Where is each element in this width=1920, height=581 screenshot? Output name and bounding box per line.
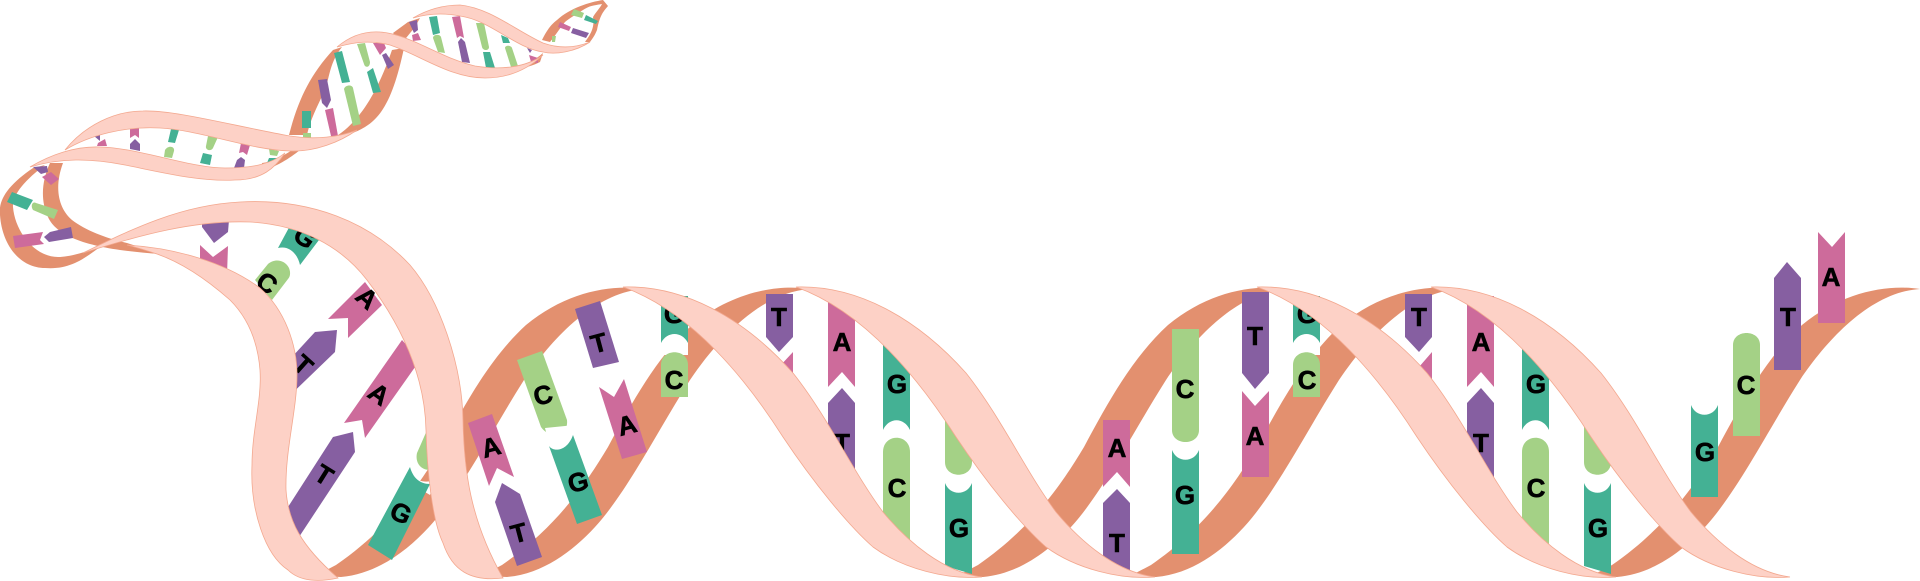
pair: G-C 2: C xyxy=(888,473,907,503)
single base: G xyxy=(1691,405,1718,497)
bar: T purple upper xyxy=(280,330,337,405)
pair: T-A 1 xyxy=(766,294,794,395)
orange ribbon: upper helix right segment xyxy=(335,48,404,137)
pair: A-T 3: A xyxy=(1472,327,1491,357)
pair: A-T 2: T xyxy=(1109,528,1125,558)
bars: lobe 1 xyxy=(7,166,73,248)
orange ribbon: lower helix 2 xyxy=(481,288,810,577)
pink ribbon: big arc into twist xyxy=(83,202,503,579)
base pairs: upper helix small bars xyxy=(7,9,598,248)
pink ribbon: descending left loop xyxy=(127,245,338,580)
bar: A pink middle xyxy=(344,340,420,438)
base pairs: tilted bars in the twist xyxy=(200,219,647,566)
orange ribbon: curl outer xyxy=(0,165,100,268)
bar: T purple lower: T xyxy=(309,458,339,492)
pair: G-C 1: C xyxy=(665,365,684,395)
orange ribbon: tail xyxy=(1591,288,1920,577)
pair: A-T 2 xyxy=(1103,420,1130,571)
single base: T xyxy=(1774,262,1801,370)
pair: T-A 2: T xyxy=(1247,321,1263,351)
pair: A-T 1: T xyxy=(834,428,850,458)
pair: A-T 3 xyxy=(1467,296,1494,482)
single base: C: C xyxy=(1737,370,1756,400)
bar: C green top: C xyxy=(251,265,283,301)
orange ribbon: near-top segment xyxy=(520,53,543,68)
bar: G teal lower: G xyxy=(385,495,417,531)
orange ribbon: curl inner xyxy=(43,163,160,254)
bar: G teal tilted xyxy=(545,425,602,524)
bar: purple top xyxy=(202,220,229,243)
orange ribbon: lower helix 3 xyxy=(957,288,1286,577)
bar: A pink tilted: A xyxy=(614,408,640,442)
pair: A-T 1 xyxy=(828,296,855,482)
pair: A-T 3: T xyxy=(1473,428,1489,458)
bars: lobe 4 xyxy=(409,16,538,68)
bar: G teal top xyxy=(278,219,322,265)
bar: T purple upper: T xyxy=(287,349,319,382)
pair: T-A 3: T xyxy=(1411,302,1427,332)
bar: G teal top: G xyxy=(288,219,322,255)
pink ribbon: main crest 2 xyxy=(796,287,1155,577)
bar: C green tilted xyxy=(517,351,567,434)
pair: G-C 3 xyxy=(1293,296,1320,397)
bar: A pink lower xyxy=(468,414,514,486)
bar: T purple lowest xyxy=(495,483,542,566)
orange ribbon: lower helix 4 xyxy=(1130,288,1459,577)
pair: C-G 1: G xyxy=(949,513,969,543)
pair: G-C 1 xyxy=(660,296,688,397)
bar: T purple tilted xyxy=(575,301,619,380)
base pairs: vertical bars xyxy=(660,232,1845,574)
pair: G-C 2: G xyxy=(887,369,907,399)
pink ribbon: main crest 4 xyxy=(1431,287,1790,577)
bars: lobe 2 xyxy=(94,128,279,168)
bar: A pink tilted xyxy=(593,362,647,459)
bar: A pink middle: A xyxy=(363,376,395,412)
bar: A pink upper xyxy=(328,281,384,338)
pair: C-G 1 xyxy=(945,405,972,574)
single base: C xyxy=(1733,333,1760,436)
pair: C-G 3 xyxy=(1584,405,1611,574)
single base: A: A xyxy=(1822,262,1841,292)
pair: T-A 3 xyxy=(1405,294,1433,395)
pair: C-G 2 xyxy=(1172,329,1199,554)
orange ribbon: lobe link xyxy=(262,150,300,170)
pair: T-A 2: A xyxy=(1246,421,1265,451)
pair: G-C 4: C xyxy=(1527,473,1546,503)
pair: C-G 3: G xyxy=(1588,513,1608,543)
bar: T purple tilted: T xyxy=(587,326,611,360)
bar: T purple lowest: T xyxy=(507,516,531,550)
bar: A pink lower: A xyxy=(478,430,504,464)
bar: C green tilted: C xyxy=(530,378,556,412)
pink ribbon: upper helix lobe 4 front xyxy=(413,5,590,53)
pink ribbon: main crest 3 xyxy=(1257,287,1616,577)
pair: G-C 3: G xyxy=(1297,299,1317,329)
single base: A xyxy=(1818,232,1845,323)
bar: G teal tilted: G xyxy=(564,465,592,499)
pair: C-G 2: G xyxy=(1175,480,1195,510)
pair: G-C 1: G xyxy=(664,299,684,329)
bar: T purple lower xyxy=(280,432,355,537)
bars: lobe 5 xyxy=(552,9,598,42)
orange ribbon: lower helix 1 xyxy=(315,288,644,577)
pair: T-A 1: T xyxy=(771,302,787,332)
pink ribbon: upper helix lobe 3 front xyxy=(337,32,543,78)
orange ribbon: top link xyxy=(393,18,420,43)
pair: A-T 1: A xyxy=(833,327,852,357)
pair: G-C 3: C xyxy=(1298,365,1317,395)
bars: lobe 3 xyxy=(302,43,394,140)
bar: G teal lower xyxy=(368,462,435,560)
pink ribbon: upper helix lobe 1 front xyxy=(30,147,285,180)
orange ribbon: top tip xyxy=(542,0,608,42)
pair: C-G 2: C xyxy=(1176,374,1195,404)
bar: pink top xyxy=(200,245,228,275)
pair: G-C 4: G xyxy=(1526,369,1546,399)
single base: G: G xyxy=(1695,437,1715,467)
bar: C green lower xyxy=(417,428,430,470)
orange ribbon: upper helix left segment xyxy=(289,47,342,135)
bar: A pink upper: A xyxy=(350,281,384,316)
pair: G-C 4 xyxy=(1522,335,1549,545)
pink ribbon: main crest 1 xyxy=(623,287,982,577)
pair: A-T 2: A xyxy=(1108,433,1127,463)
pair: G-C 2 xyxy=(883,335,910,545)
pair: T-A 2 xyxy=(1242,292,1269,477)
single base: T: T xyxy=(1780,302,1796,332)
pink ribbon: upper helix lobe 2 front xyxy=(65,111,357,151)
